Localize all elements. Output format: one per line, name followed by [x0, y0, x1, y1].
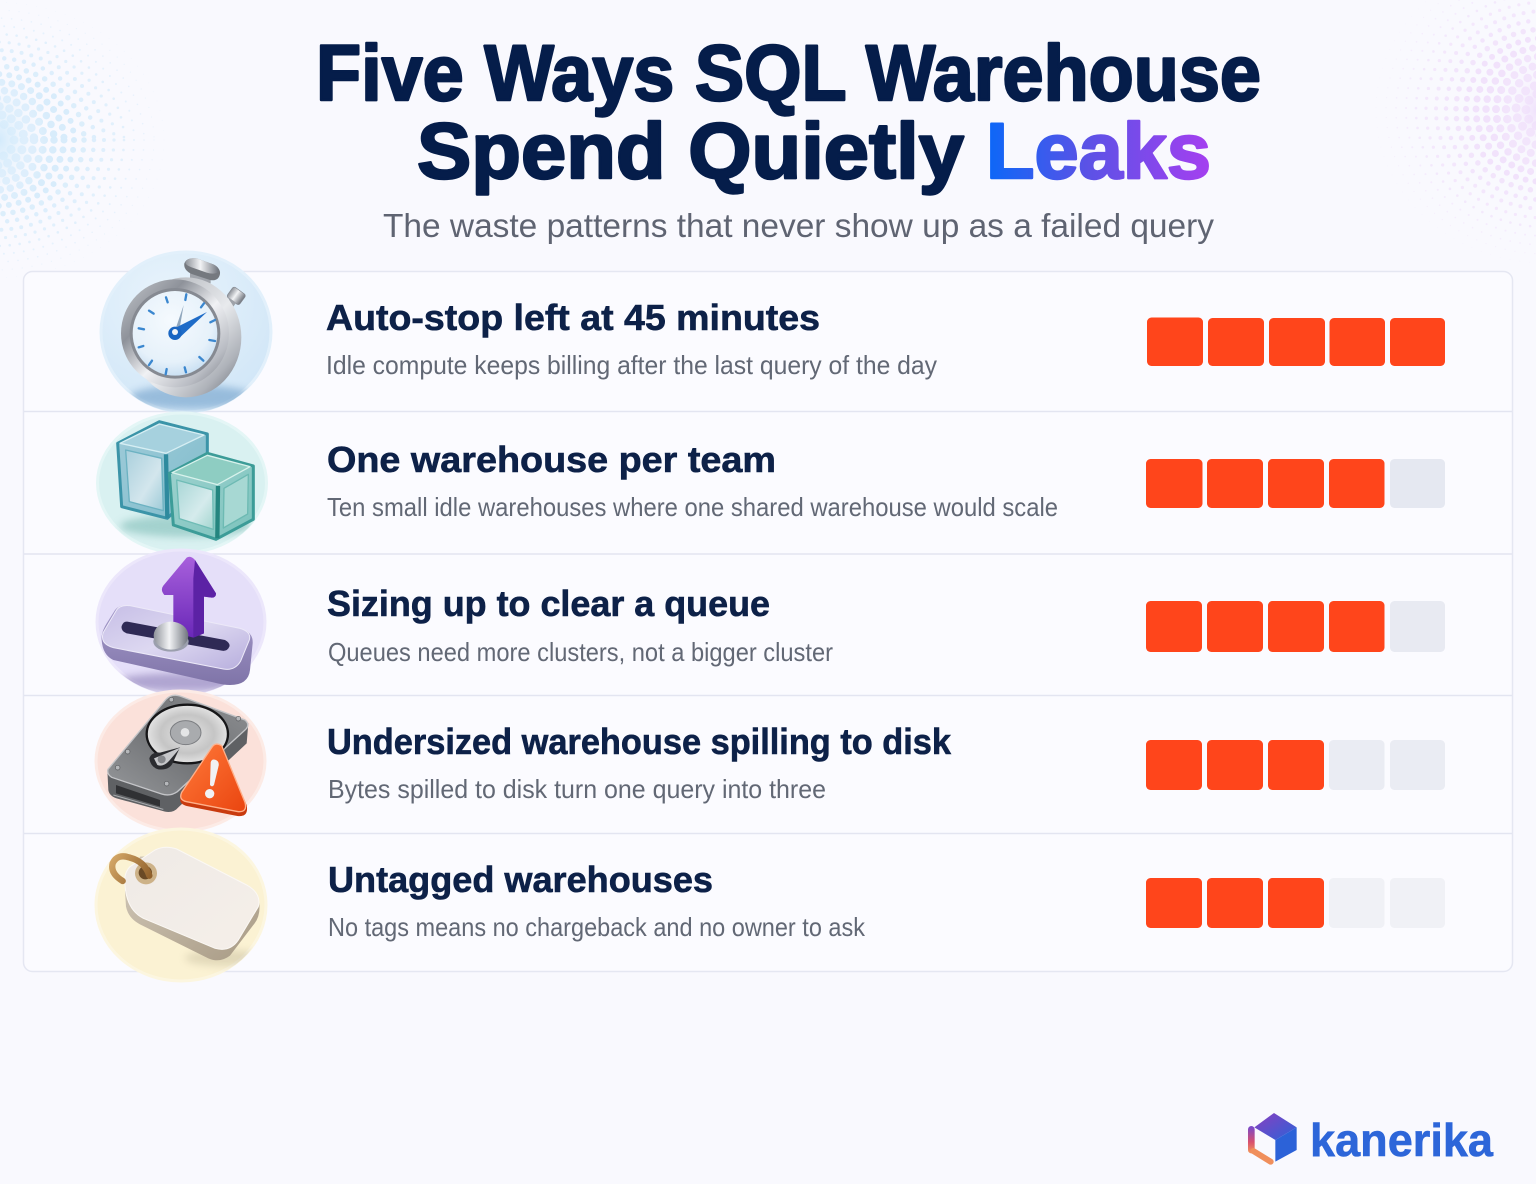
decorative halftone glow: right: [1376, 0, 1536, 263]
panel: list card: [24, 272, 1512, 972]
heading: Untagged warehouses: [328, 859, 713, 900]
severity meter: 3 of 5: [1146, 878, 1445, 928]
severity meter: 4 of 5: [1146, 601, 1445, 652]
title: Spend Quietly: [417, 106, 964, 195]
description: No tags means no chargeback and no owner to ask: [328, 912, 866, 942]
title: [316, 28, 1261, 195]
subtitle: The waste patterns that never show up as a failed query: [383, 207, 1214, 244]
heading: One warehouse per team: [327, 439, 776, 480]
icon: logo cube: [1251, 1113, 1297, 1162]
severity meter: 3 of 5: [1146, 740, 1445, 790]
icon: glass cubes: [98, 413, 266, 553]
heading: Sizing up to clear a queue: [327, 583, 770, 624]
kanerika logo: [1251, 1113, 1493, 1166]
row 4: undersized warehouse: [96, 691, 1445, 831]
heading: Auto-stop left at 45 minutes: [326, 297, 820, 338]
row 5: untagged warehouses: [96, 829, 1445, 981]
wordmark: kanerika: [1310, 1114, 1493, 1166]
description: Bytes spilled to disk turn one query into three: [328, 774, 826, 804]
row 3: sizing up: [97, 550, 1445, 694]
icon: slider with up arrow: [97, 550, 265, 694]
severity meter: 5 of 5: [1147, 318, 1445, 366]
severity meter: 4 of 5: [1146, 459, 1445, 508]
description: Queues need more clusters, not a bigger cluster: [328, 637, 833, 667]
row 1: auto-stop: [101, 252, 1445, 412]
icon: stopwatch: [101, 252, 271, 412]
title: Leaks: [986, 106, 1211, 195]
decorative halftone glow: left: [0, 2, 164, 278]
decorative glow core: right: [1496, 40, 1536, 180]
icon: blank tag: [96, 829, 266, 981]
description: Ten small idle warehouses where one shared warehouse would scale: [327, 492, 1058, 522]
decorative glow core: left: [0, 65, 50, 215]
icon: hard disk with warning: [96, 691, 265, 831]
row 2: one warehouse per team: [98, 413, 1445, 553]
heading: Undersized warehouse spilling to disk: [327, 721, 952, 762]
title: Five Ways SQL Warehouse: [316, 28, 1261, 117]
description: Idle compute keeps billing after the last query of the day: [326, 350, 937, 380]
